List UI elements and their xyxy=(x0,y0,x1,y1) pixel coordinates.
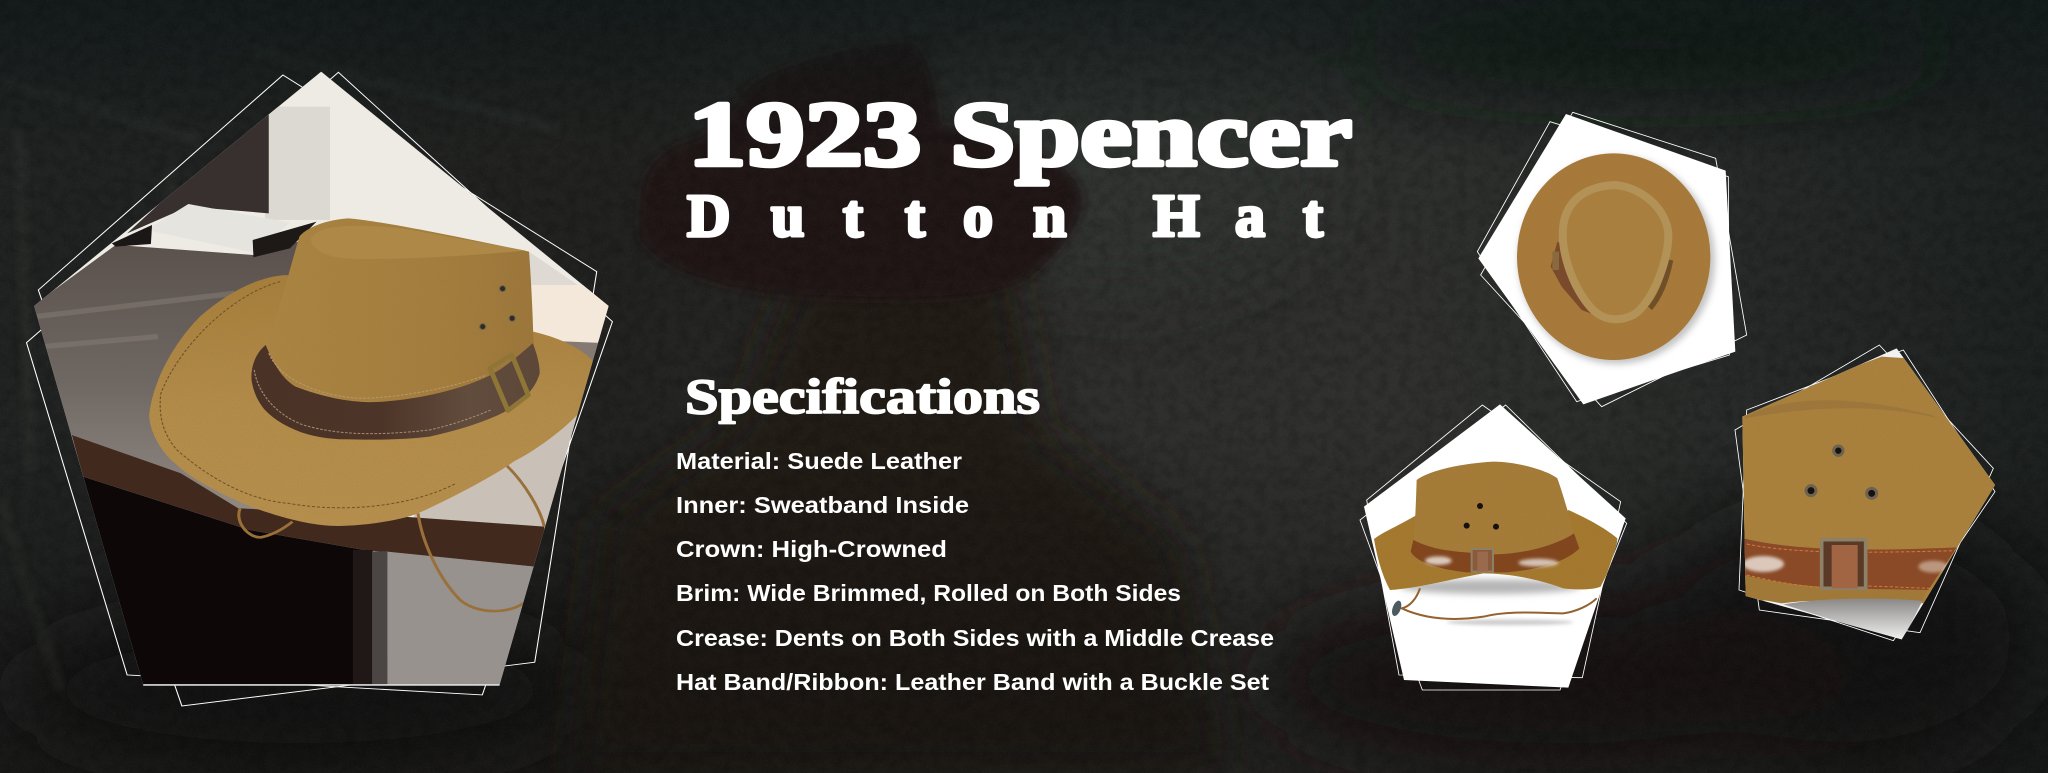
photo: main hat pentagon xyxy=(27,70,612,706)
crown xyxy=(1413,462,1575,557)
specifications list: Hat Band/Ribbon: Leather Band with a Buckle Set xyxy=(676,669,1269,695)
photo: top view of hat xyxy=(1477,112,1747,407)
lower brim xyxy=(1742,573,1928,603)
specifications list xyxy=(676,448,1274,695)
specifications list: Inner: Sweatband Inside xyxy=(676,492,969,518)
leather band xyxy=(1743,538,1957,590)
specifications list: Crown: High-Crowned xyxy=(676,536,947,562)
suede crown xyxy=(1738,357,1998,603)
outline frames xyxy=(27,72,612,706)
band xyxy=(1411,533,1579,572)
specifications list: Brim: Wide Brimmed, Rolled on Both Sides xyxy=(676,580,1181,606)
background figure: torso xyxy=(570,260,1230,773)
office scene behind hat xyxy=(31,70,611,687)
hat brim xyxy=(149,275,592,526)
specifications list: Material: Suede Leather xyxy=(676,448,962,474)
buckle xyxy=(1472,549,1493,572)
eyelets xyxy=(1806,446,1877,498)
hat leather band xyxy=(251,343,540,440)
hat chin cord xyxy=(239,465,544,611)
outline frames xyxy=(1360,405,1627,690)
hat brim from above xyxy=(1517,153,1710,360)
title: Dutton Hat xyxy=(687,183,1323,249)
brim xyxy=(1374,510,1617,590)
hat band xyxy=(1550,242,1591,314)
title: 1923 Spencer xyxy=(688,83,1352,185)
hat crown xyxy=(267,218,534,403)
specifications list: Crease: Dents on Both Sides with a Middle Crease xyxy=(676,625,1274,651)
grey shadow xyxy=(1783,599,1922,642)
photo: front view of hat xyxy=(1360,404,1627,690)
outline frames xyxy=(1735,345,1995,641)
photo: close-up of hat band and eyelets xyxy=(1735,345,1998,642)
outline frames xyxy=(1477,112,1747,407)
hat crown xyxy=(1563,185,1668,319)
shadow xyxy=(1400,579,1580,594)
buckle xyxy=(490,355,528,411)
eyelets xyxy=(480,286,515,330)
eyelets xyxy=(1464,503,1499,530)
specifications heading: Specifications xyxy=(685,368,1040,424)
title xyxy=(687,83,1352,249)
buckle xyxy=(1822,540,1866,588)
background figure: hat silhouette xyxy=(639,42,1082,300)
cord xyxy=(1402,588,1597,619)
